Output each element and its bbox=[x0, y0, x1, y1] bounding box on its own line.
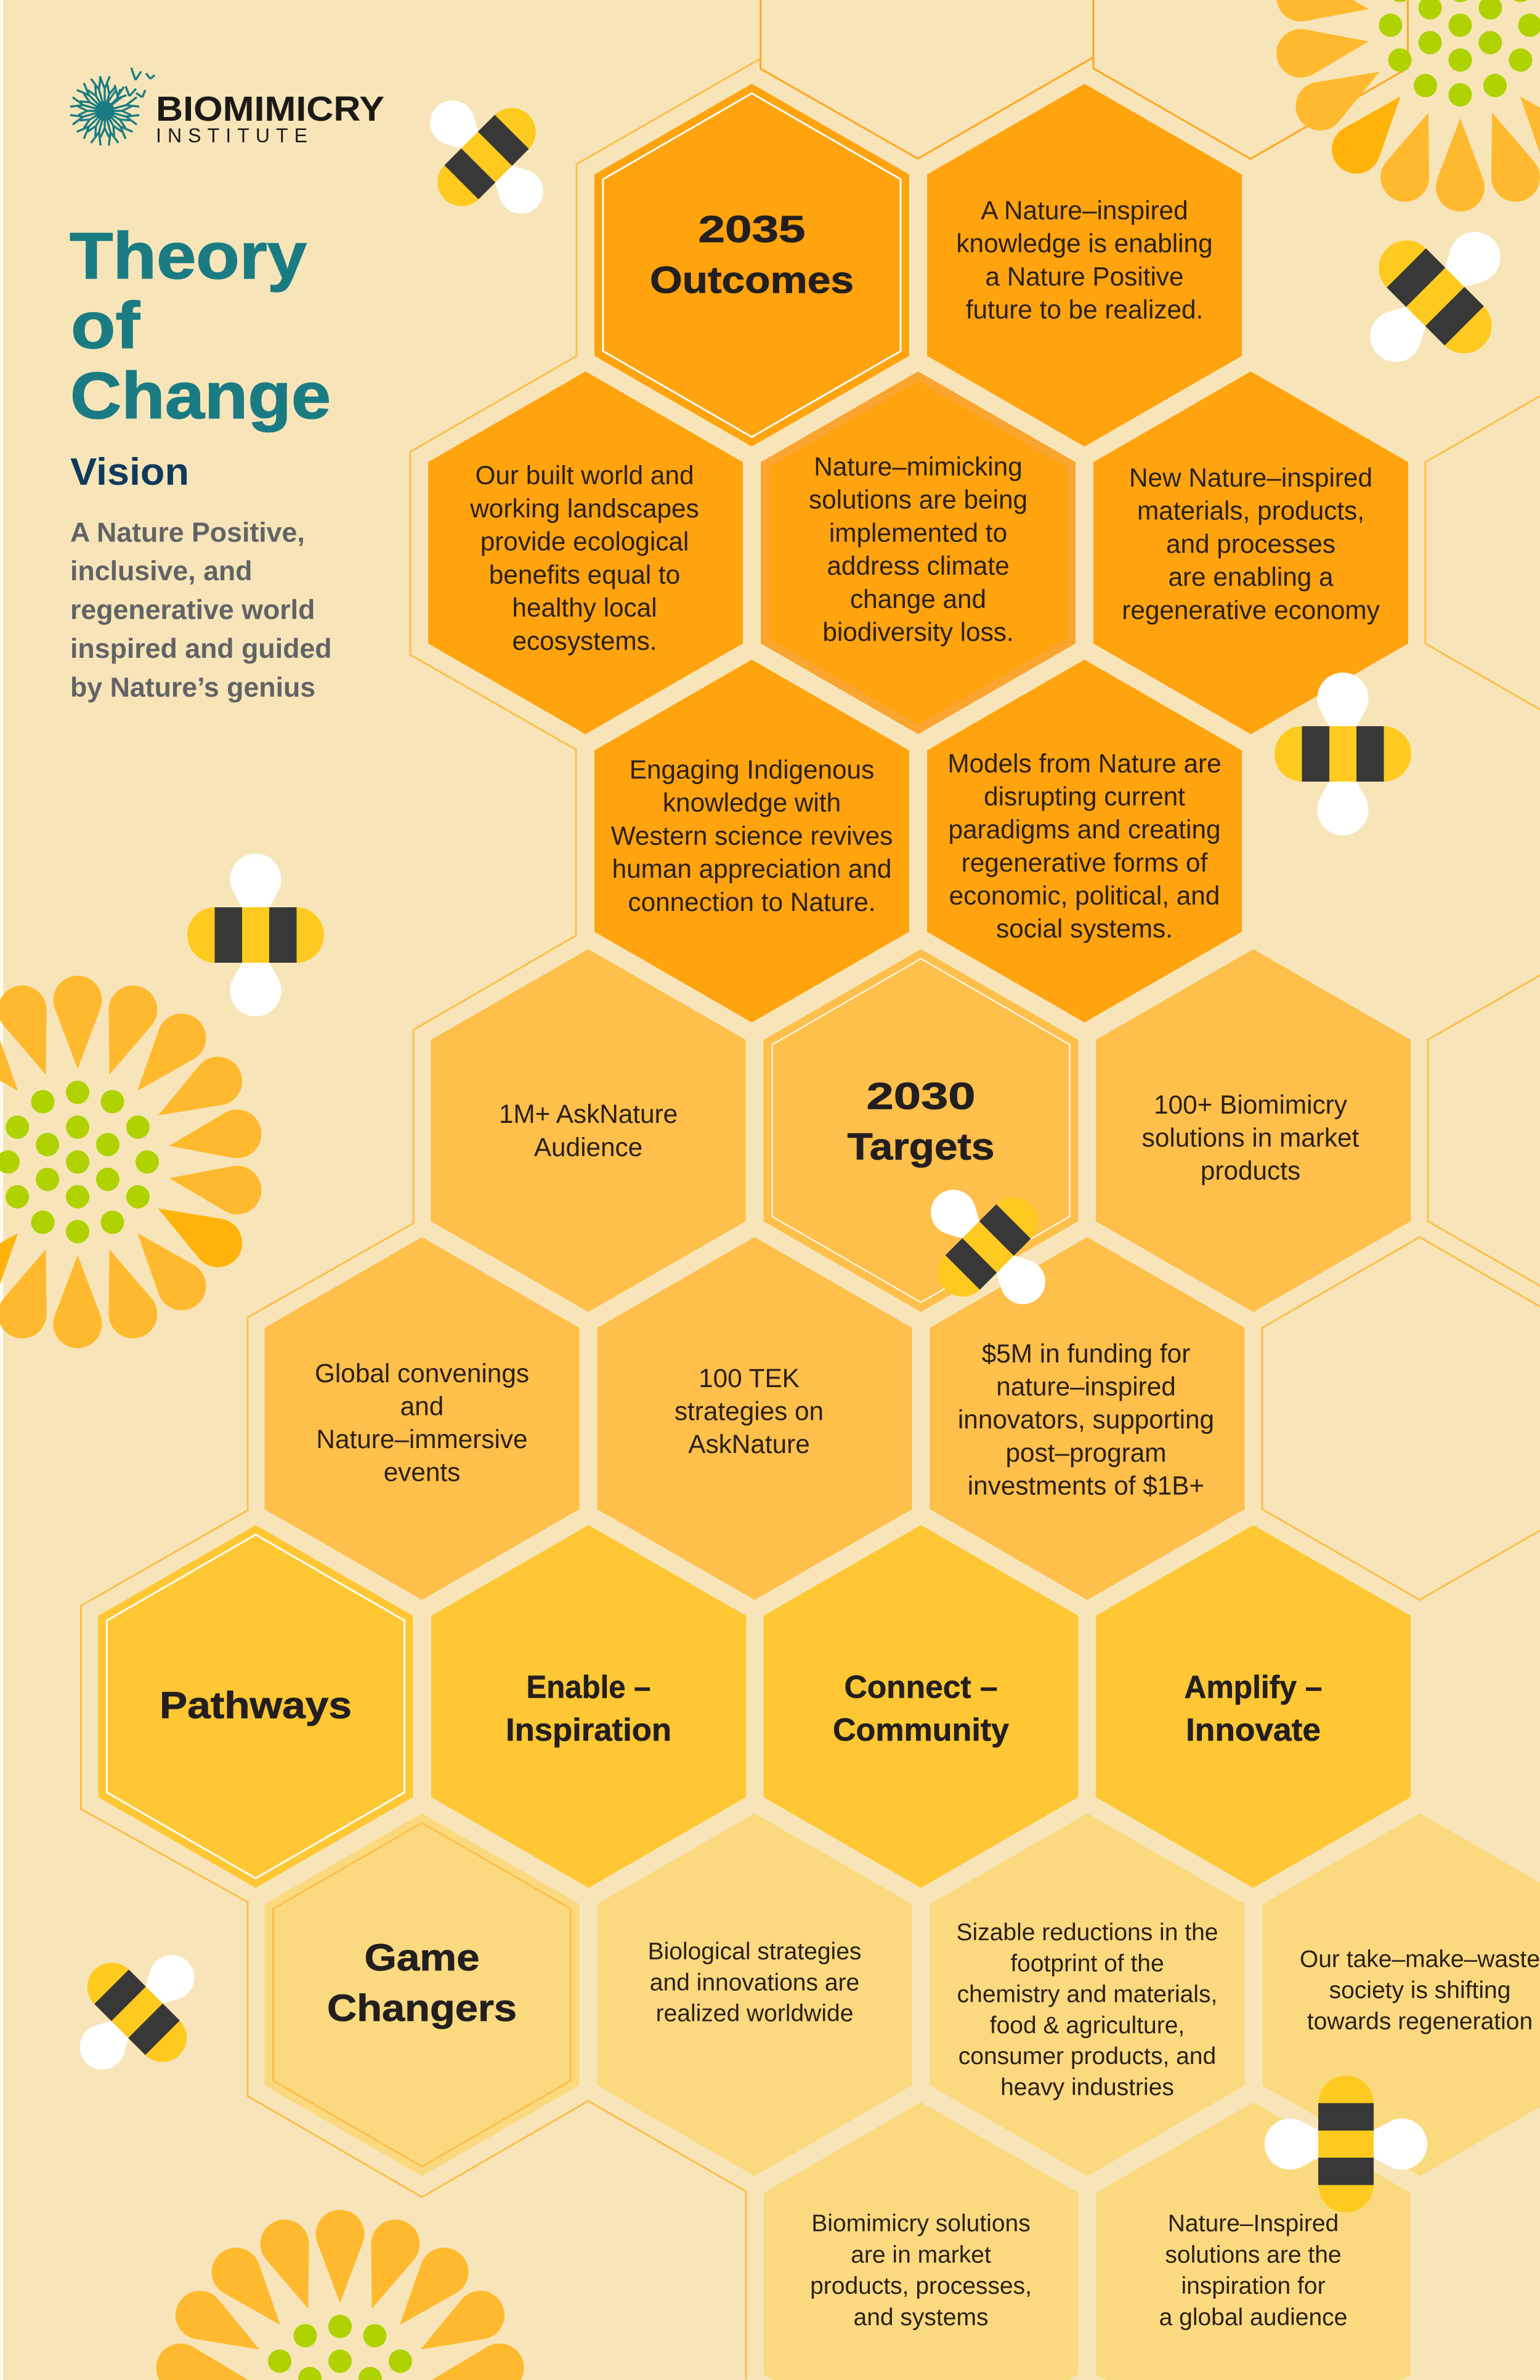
hexagon: global audience inspiration: inspiration for bbox=[1181, 2273, 1326, 2299]
logo: Biomimicry Institute: INSTITUTE bbox=[156, 124, 307, 147]
hexagon: solutions in market: products, processes, bbox=[810, 2273, 1032, 2299]
hexagon: disrupting paradigms: disrupting current bbox=[984, 782, 1185, 811]
hexagon: regenerative economy bbox=[1093, 371, 1408, 734]
hexagon: biological strategies: Biological strategies bbox=[648, 1938, 861, 1965]
title: Change bbox=[70, 358, 331, 432]
hexagon: Enable Inspiration: Inspiration bbox=[506, 1712, 671, 1748]
hexagon: market solutions target: solutions in market bbox=[1142, 1123, 1360, 1152]
bee: right horizontal bbox=[1275, 673, 1411, 835]
hexagon: built world: Our built world and bbox=[475, 461, 694, 490]
hexagon: funding target: $5M in funding for bbox=[982, 1339, 1190, 1368]
bee: top right bbox=[1329, 191, 1540, 403]
hexagon: AskNature audience target bbox=[431, 949, 745, 1312]
hexagon: funding target: post–program bbox=[1006, 1438, 1166, 1467]
hexagon: footprint reductions bbox=[930, 1813, 1244, 2176]
bee: left horizontal bbox=[187, 854, 324, 1016]
bee: on 2030 Targets bbox=[895, 1154, 1081, 1340]
text: vision statement: regenerative world bbox=[70, 595, 315, 625]
hexagon: disrupting paradigms: Models from Nature are bbox=[947, 749, 1222, 778]
hexagon: built world: ecosystems. bbox=[512, 626, 657, 655]
hexagon: global convenings target bbox=[265, 1237, 579, 1600]
text: vision statement bbox=[70, 517, 332, 703]
hexagon: Indigenous knowledge: connection to Nature. bbox=[628, 888, 876, 917]
hexagon: TEK strategies target: AskNature bbox=[688, 1430, 810, 1459]
hexagon: funding target bbox=[930, 1237, 1244, 1600]
hexagon: market solutions target: products bbox=[1201, 1156, 1300, 1185]
hexagon: built world: benefits equal to bbox=[489, 560, 680, 589]
outline hexagon: right middle bbox=[1428, 949, 1540, 1312]
hexagon: Connect Community bbox=[764, 1525, 1078, 1888]
hexagon: Indigenous knowledge: Western science revives bbox=[611, 821, 893, 850]
title: of bbox=[71, 288, 140, 362]
hexagon heading: Game Changers: Changers bbox=[327, 1987, 517, 2029]
hexagon: built world: healthy local bbox=[512, 593, 657, 622]
bee: bottom right vertical bbox=[1265, 2076, 1427, 2212]
hexagon heading: Game Changers bbox=[265, 1813, 579, 2176]
hexagon: global convenings target: Global convenings bbox=[315, 1359, 529, 1388]
honeycomb outline: left boundary bbox=[81, 59, 760, 2379]
hexagon: disrupting paradigms: paradigms and creating bbox=[948, 815, 1221, 844]
hexagon: solutions in market: Biomimicry solutions bbox=[811, 2210, 1031, 2237]
hexagon heading: Game Changers: Game bbox=[365, 1937, 479, 1978]
heading: Vision: Vision bbox=[70, 451, 189, 493]
hexagon heading: 2030 Targets bbox=[764, 949, 1078, 1312]
hexagon: biological strategies: realized worldwide bbox=[656, 2001, 853, 2027]
hexagon: disrupting paradigms: economic, political, and bbox=[949, 881, 1220, 910]
hexagon: global convenings target: and bbox=[400, 1392, 444, 1420]
hexagon heading: 2035 Outcomes: 2035 bbox=[699, 208, 806, 250]
text: vision statement: inspired and guided bbox=[70, 634, 332, 664]
hexagon heading: 2035 Outcomes: Outcomes bbox=[650, 259, 854, 301]
honeycomb outline: top edge bbox=[761, 0, 1408, 159]
hexagon: built world: working landscapes bbox=[469, 494, 699, 523]
hexagon heading: 2035 Outcomes bbox=[594, 84, 909, 447]
hexagon: Connect Community: Connect – bbox=[844, 1669, 998, 1705]
hexagon: global convenings target: Nature–immersive bbox=[316, 1425, 528, 1454]
hexagon: funding target: nature–inspired bbox=[996, 1372, 1176, 1401]
hexagon: disrupting paradigms bbox=[927, 660, 1242, 1022]
hexagon: disrupting paradigms: regenerative forms of bbox=[962, 848, 1208, 877]
hexagon: nature-mimicking solutions: implemented to bbox=[829, 518, 1007, 547]
hexagon: Enable Inspiration bbox=[431, 1525, 746, 1888]
hexagon: Amplify Innovate: Innovate bbox=[1186, 1712, 1321, 1748]
hexagon: footprint reductions: footprint of the bbox=[1010, 1950, 1164, 1977]
hexagon: Nature Positive future: knowledge is enabling bbox=[956, 229, 1213, 258]
hexagon: Indigenous knowledge: human appreciation and bbox=[612, 854, 891, 883]
flower: bottom bbox=[156, 2210, 524, 2380]
hexagon: solutions in market: and systems bbox=[854, 2304, 988, 2331]
outline hexagon: right lower bbox=[1262, 1237, 1540, 1600]
hexagon: global audience inspiration: a global audience bbox=[1159, 2304, 1347, 2331]
text: vision statement: inclusive, and bbox=[70, 556, 253, 586]
hexagon: Connect Community: Community bbox=[833, 1712, 1009, 1748]
hexagon: footprint reductions: consumer products, and bbox=[958, 2043, 1216, 2070]
hexagon: AskNature audience target: 1M+ AskNature bbox=[499, 1099, 678, 1128]
hexagon heading: Pathways: Pathways bbox=[160, 1684, 352, 1726]
hexagon: funding target: investments of $1B+ bbox=[968, 1471, 1204, 1500]
hexagon: TEK strategies target: 100 TEK bbox=[699, 1364, 800, 1393]
hexagon: market solutions target bbox=[1096, 949, 1411, 1312]
title bbox=[70, 219, 331, 432]
hexagon: take-make-waste shift: Our take–make–waste bbox=[1300, 1946, 1540, 1972]
hexagon: nature-mimicking solutions: Nature–mimicking bbox=[814, 452, 1023, 481]
hexagon: take-make-waste shift bbox=[1263, 1813, 1540, 2176]
hexagon: nature-mimicking solutions: biodiversity loss. bbox=[822, 617, 1014, 647]
hexagon: Indigenous knowledge: Engaging Indigenous bbox=[630, 755, 874, 784]
bee: bottom left bbox=[44, 1919, 230, 2105]
hexagon: Amplify Innovate: Amplify – bbox=[1184, 1669, 1322, 1705]
hexagon: take-make-waste shift: towards regeneration bbox=[1307, 2008, 1533, 2034]
hexagon: solutions in market: are in market bbox=[851, 2241, 991, 2268]
hexagon: regenerative economy: materials, products, bbox=[1137, 496, 1364, 525]
flower: top right bbox=[1273, 0, 1540, 211]
logo: Biomimicry Institute: BIOMIMICRY bbox=[156, 89, 384, 129]
hexagon: Nature Positive future: A Nature–inspired bbox=[981, 196, 1188, 225]
hexagon: global convenings target: events bbox=[384, 1457, 460, 1487]
hexagon: regenerative economy: New Nature–inspired bbox=[1129, 463, 1372, 492]
hexagon: Nature Positive future: a Nature Positive bbox=[985, 262, 1184, 291]
hexagon: regenerative economy: regenerative economy bbox=[1122, 596, 1380, 625]
hexagon: regenerative economy: and processes bbox=[1166, 529, 1335, 558]
outline hexagon: right upper bbox=[1425, 371, 1540, 734]
hexagon: biological strategies: and innovations are bbox=[650, 1969, 859, 1996]
text: vision statement: by Nature’s genius bbox=[70, 673, 315, 703]
text: vision statement: A Nature Positive, bbox=[70, 517, 305, 548]
hexagon: funding target: innovators, supporting bbox=[958, 1405, 1214, 1434]
hexagon: Nature Positive future bbox=[927, 84, 1242, 447]
hexagon: footprint reductions: heavy industries bbox=[1000, 2074, 1174, 2100]
title: Theory bbox=[70, 219, 307, 293]
hexagon: TEK strategies target bbox=[598, 1237, 912, 1600]
hexagon: market solutions target: 100+ Biomimicry bbox=[1154, 1090, 1348, 1119]
hexagon: Amplify Innovate bbox=[1096, 1525, 1411, 1888]
hexagon: footprint reductions: food & agriculture, bbox=[990, 2012, 1185, 2039]
hexagon: global audience inspiration: Nature–Inspired bbox=[1168, 2210, 1339, 2237]
hexagon: Indigenous knowledge: knowledge with bbox=[663, 788, 841, 817]
hexagon: nature-mimicking solutions: address climate bbox=[827, 551, 1010, 580]
hexagon: footprint reductions: Sizable reductions in the bbox=[957, 1919, 1218, 1946]
hexagon: biological strategies bbox=[598, 1813, 912, 2176]
hexagon: built world bbox=[428, 371, 743, 734]
hexagon: footprint reductions: chemistry and materials, bbox=[957, 1981, 1217, 2008]
hexagon: Enable Inspiration: Enable – bbox=[526, 1669, 650, 1705]
hexagon: solutions in market bbox=[764, 2102, 1078, 2380]
hexagon: AskNature audience target: Audience bbox=[534, 1133, 642, 1162]
hexagon heading: 2030 Targets: Targets bbox=[848, 1126, 994, 1168]
hexagon: global audience inspiration bbox=[1096, 2102, 1411, 2380]
flower: left bbox=[0, 976, 265, 1348]
icon: dandelion bbox=[70, 68, 155, 145]
hexagon: TEK strategies target: strategies on bbox=[675, 1397, 824, 1425]
logo: Biomimicry Institute bbox=[70, 68, 384, 147]
hexagon heading: 2030 Targets: 2030 bbox=[866, 1075, 976, 1117]
hexagon: Indigenous knowledge bbox=[594, 660, 909, 1022]
hexagon: global audience inspiration: solutions are the bbox=[1165, 2241, 1342, 2268]
hexagon: Nature Positive future: future to be realized. bbox=[966, 295, 1203, 324]
hexagon: disrupting paradigms: social systems. bbox=[996, 914, 1173, 943]
hexagon: nature-mimicking solutions: change and bbox=[850, 585, 986, 613]
hexagon: nature-mimicking solutions: solutions are being bbox=[809, 485, 1027, 514]
bee: top left bbox=[394, 65, 579, 249]
hexagon: take-make-waste shift: society is shifting bbox=[1329, 1977, 1510, 2004]
hexagon: nature-mimicking solutions bbox=[761, 371, 1076, 734]
hexagon: built world: provide ecological bbox=[480, 527, 689, 556]
hexagon: regenerative economy: are enabling a bbox=[1168, 562, 1334, 591]
hexagon heading: Pathways bbox=[99, 1525, 413, 1888]
